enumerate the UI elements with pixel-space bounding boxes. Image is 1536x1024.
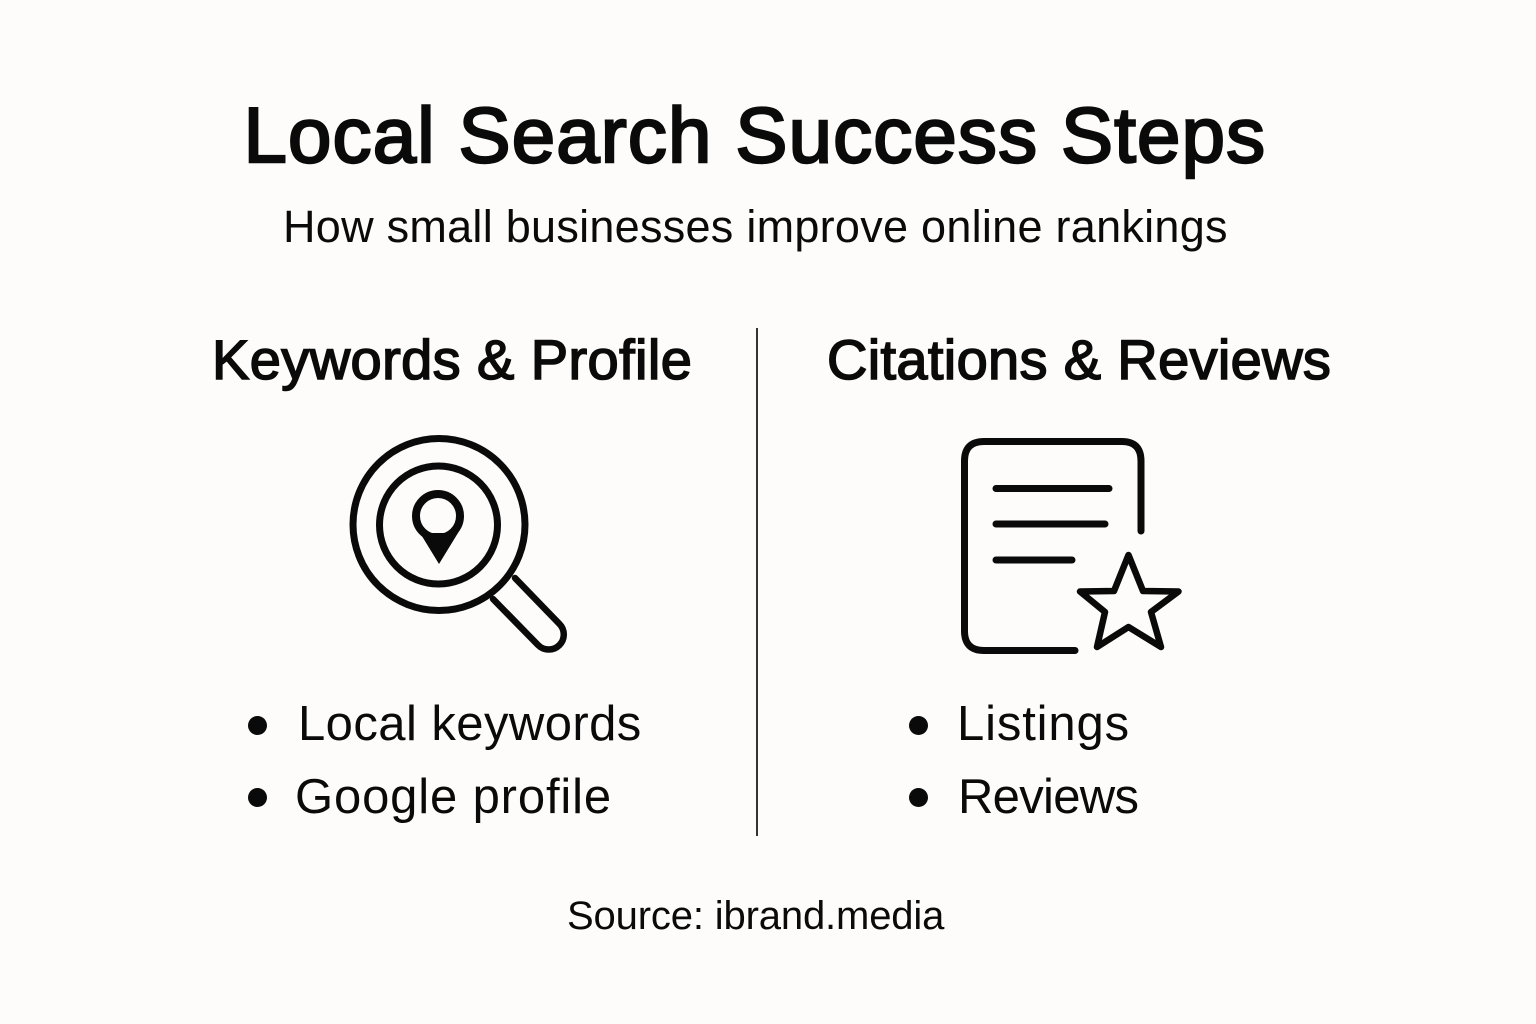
divider	[756, 328, 758, 836]
icon: document with star	[961, 438, 1182, 654]
text: local keywords: Local keywords	[298, 697, 642, 751]
bullet: local keywords	[248, 716, 266, 734]
text: reviews: Reviews	[958, 770, 1138, 824]
heading: citations and reviews: Citations & Reviews	[827, 328, 1331, 391]
text: google profile: Google profile	[295, 770, 612, 824]
bullet: google profile	[248, 788, 266, 806]
bullet list: citations and reviews	[909, 697, 1138, 824]
text: listings: Listings	[957, 697, 1130, 751]
panel: citations and reviews	[827, 328, 1331, 824]
icon: magnifier with location pin	[350, 435, 568, 653]
heading: keywords and profile: Keywords & Profile	[212, 328, 692, 391]
bullet list: keywords and profile	[248, 697, 642, 824]
bullet: listings	[909, 716, 928, 734]
panel: keywords and profile	[212, 328, 692, 824]
subtitle: How small businesses improve online rankings	[283, 201, 1228, 252]
source: Source: ibrand.media	[567, 894, 944, 938]
title: Local Search Success Steps	[244, 91, 1266, 179]
bullet: reviews	[909, 788, 928, 806]
